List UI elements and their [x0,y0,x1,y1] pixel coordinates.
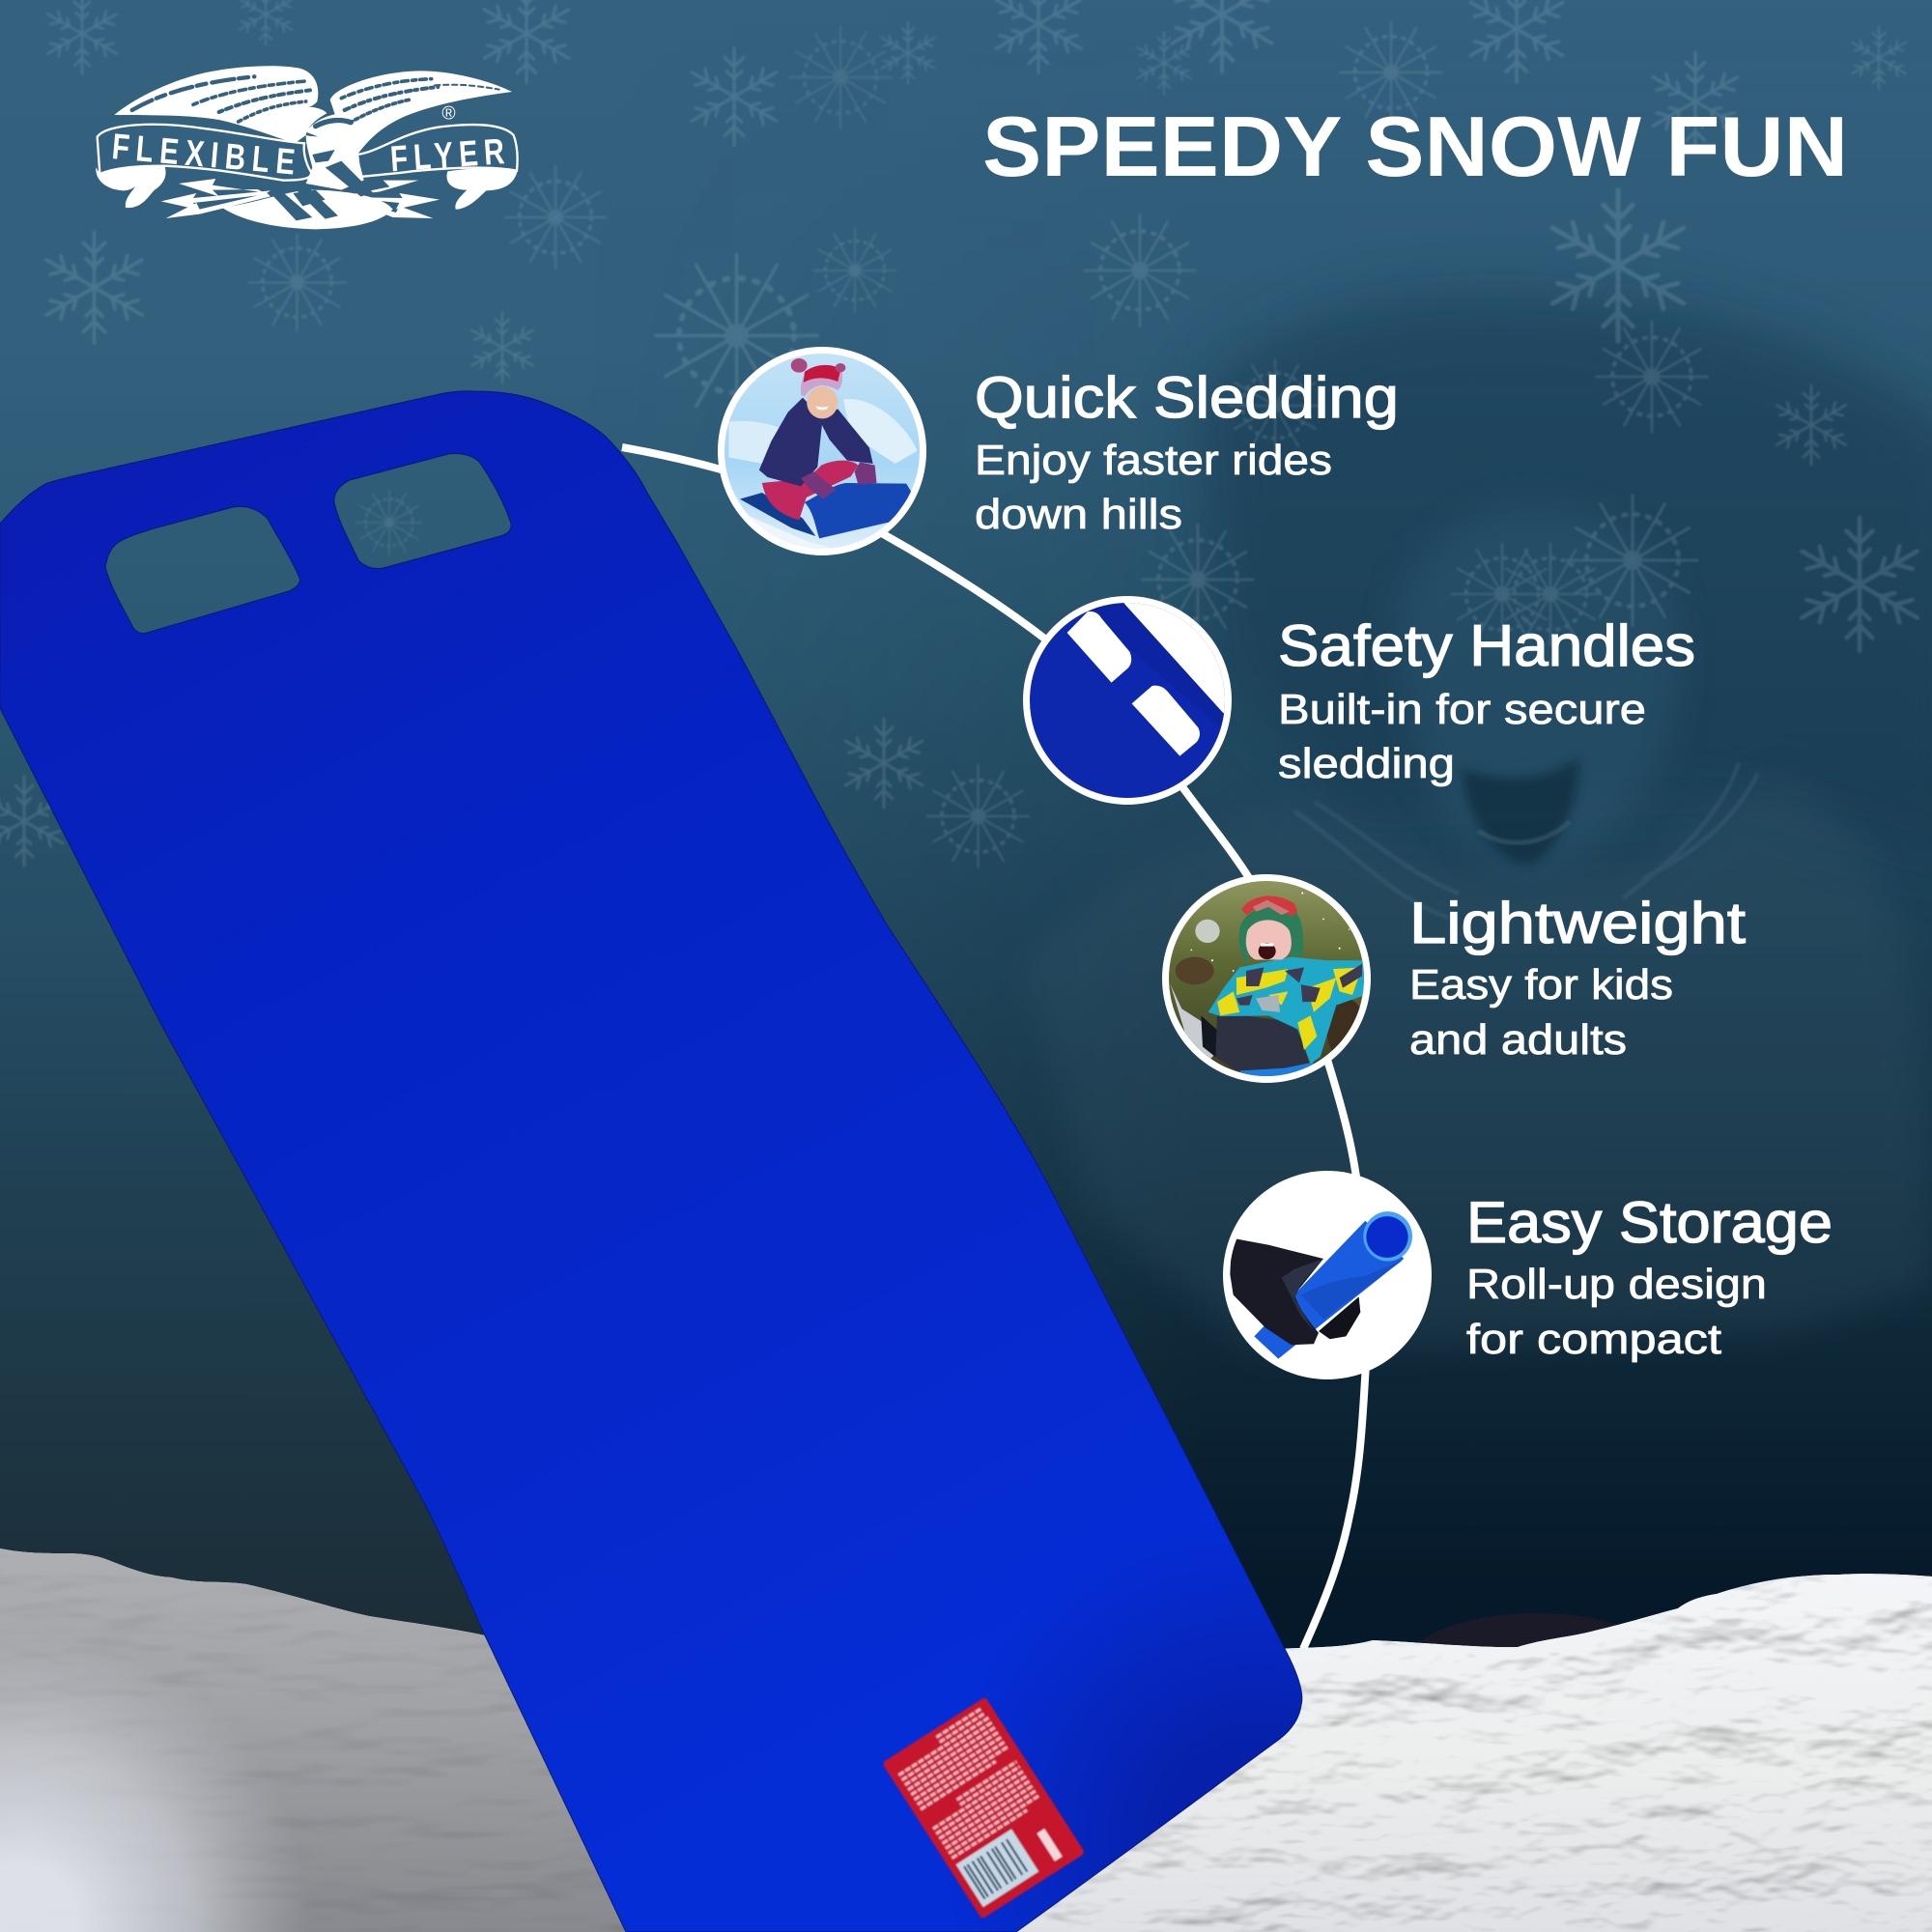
mittens [801,462,877,499]
snow specks [1190,893,1350,972]
feature 3: photo circle of child sledding [1159,874,1372,1087]
sled edge [1239,1063,1314,1078]
trousers [1215,1012,1309,1070]
logo: right wing [306,71,512,155]
blue foam sled [0,391,1302,1932]
feature 4: description line 1: Roll-up design [1466,1261,1767,1308]
connector arc through feature circles [622,447,1367,1649]
rolled tube [1254,1221,1404,1359]
feature 2: description line 2: sledding [1278,740,1455,787]
dark shape behind the snow ridge [1406,1613,1666,1719]
hat [1238,907,1303,964]
feature 4: heading: Easy Storage [1466,1190,1833,1255]
sled: warning label [882,1697,1085,1919]
feature 2: heading: Safety Handles [1278,613,1695,678]
jacket [759,398,873,486]
feature 4: description line 2: for compact [1466,1316,1721,1363]
jacket [1208,957,1365,1064]
logo: eagle body, shield and arrows [161,135,440,229]
background: ghosted laughing child [1024,294,1932,1352]
feature 2: circle showing sled handles [1023,586,1250,811]
title: SPEEDY SNOW FUN [982,99,1848,194]
feature 1: description line 2: down hills [975,491,1182,538]
background: darker right side [883,462,1932,1648]
logo: right banner [355,125,518,177]
feature 3: description line 2: and adults [1409,1016,1627,1064]
logo: registered mark: ® [441,103,456,124]
snowboots [1171,984,1219,1061]
feature 1: heading: Quick Sledding [975,365,1399,430]
decorative snowflakes [0,0,1924,867]
sled in photo [740,493,815,536]
face [1246,920,1292,960]
glove [1230,1238,1323,1345]
logo: word FLEXIBLE: FLEXIBLE [110,127,297,183]
logo: left wing [114,66,327,143]
sled: dark lower right corner shading [773,1182,1302,1932]
feature 3: description line 1: Easy for kids [1409,961,1673,1009]
logo: left banner tail [96,166,166,208]
goggles [1241,895,1297,917]
face [807,386,838,418]
feature 2: description line 1: Built-in for secure [1278,686,1646,733]
pants [762,461,858,520]
hat [801,365,842,397]
feature 1: description line 1: Enjoy faster rides [975,437,1332,484]
snow: left drift [0,1548,966,1932]
logo: Flexible Flyer eagle and banner [96,66,518,229]
logo: wing feather marks [132,76,499,127]
logo: left banner [98,125,312,181]
feature 3: heading: Lightweight [1409,891,1746,955]
snow: soft bright glow bottom left [0,1623,328,1932]
feature 1: photo circle of girl on sled [715,347,927,560]
feature 4: circle showing rolled sled in gloved hand [1223,1171,1432,1379]
snow: right drift [1005,1574,1932,1932]
logo: word FLYER: FLYER [389,131,506,180]
logo: right banner tail [446,168,518,210]
